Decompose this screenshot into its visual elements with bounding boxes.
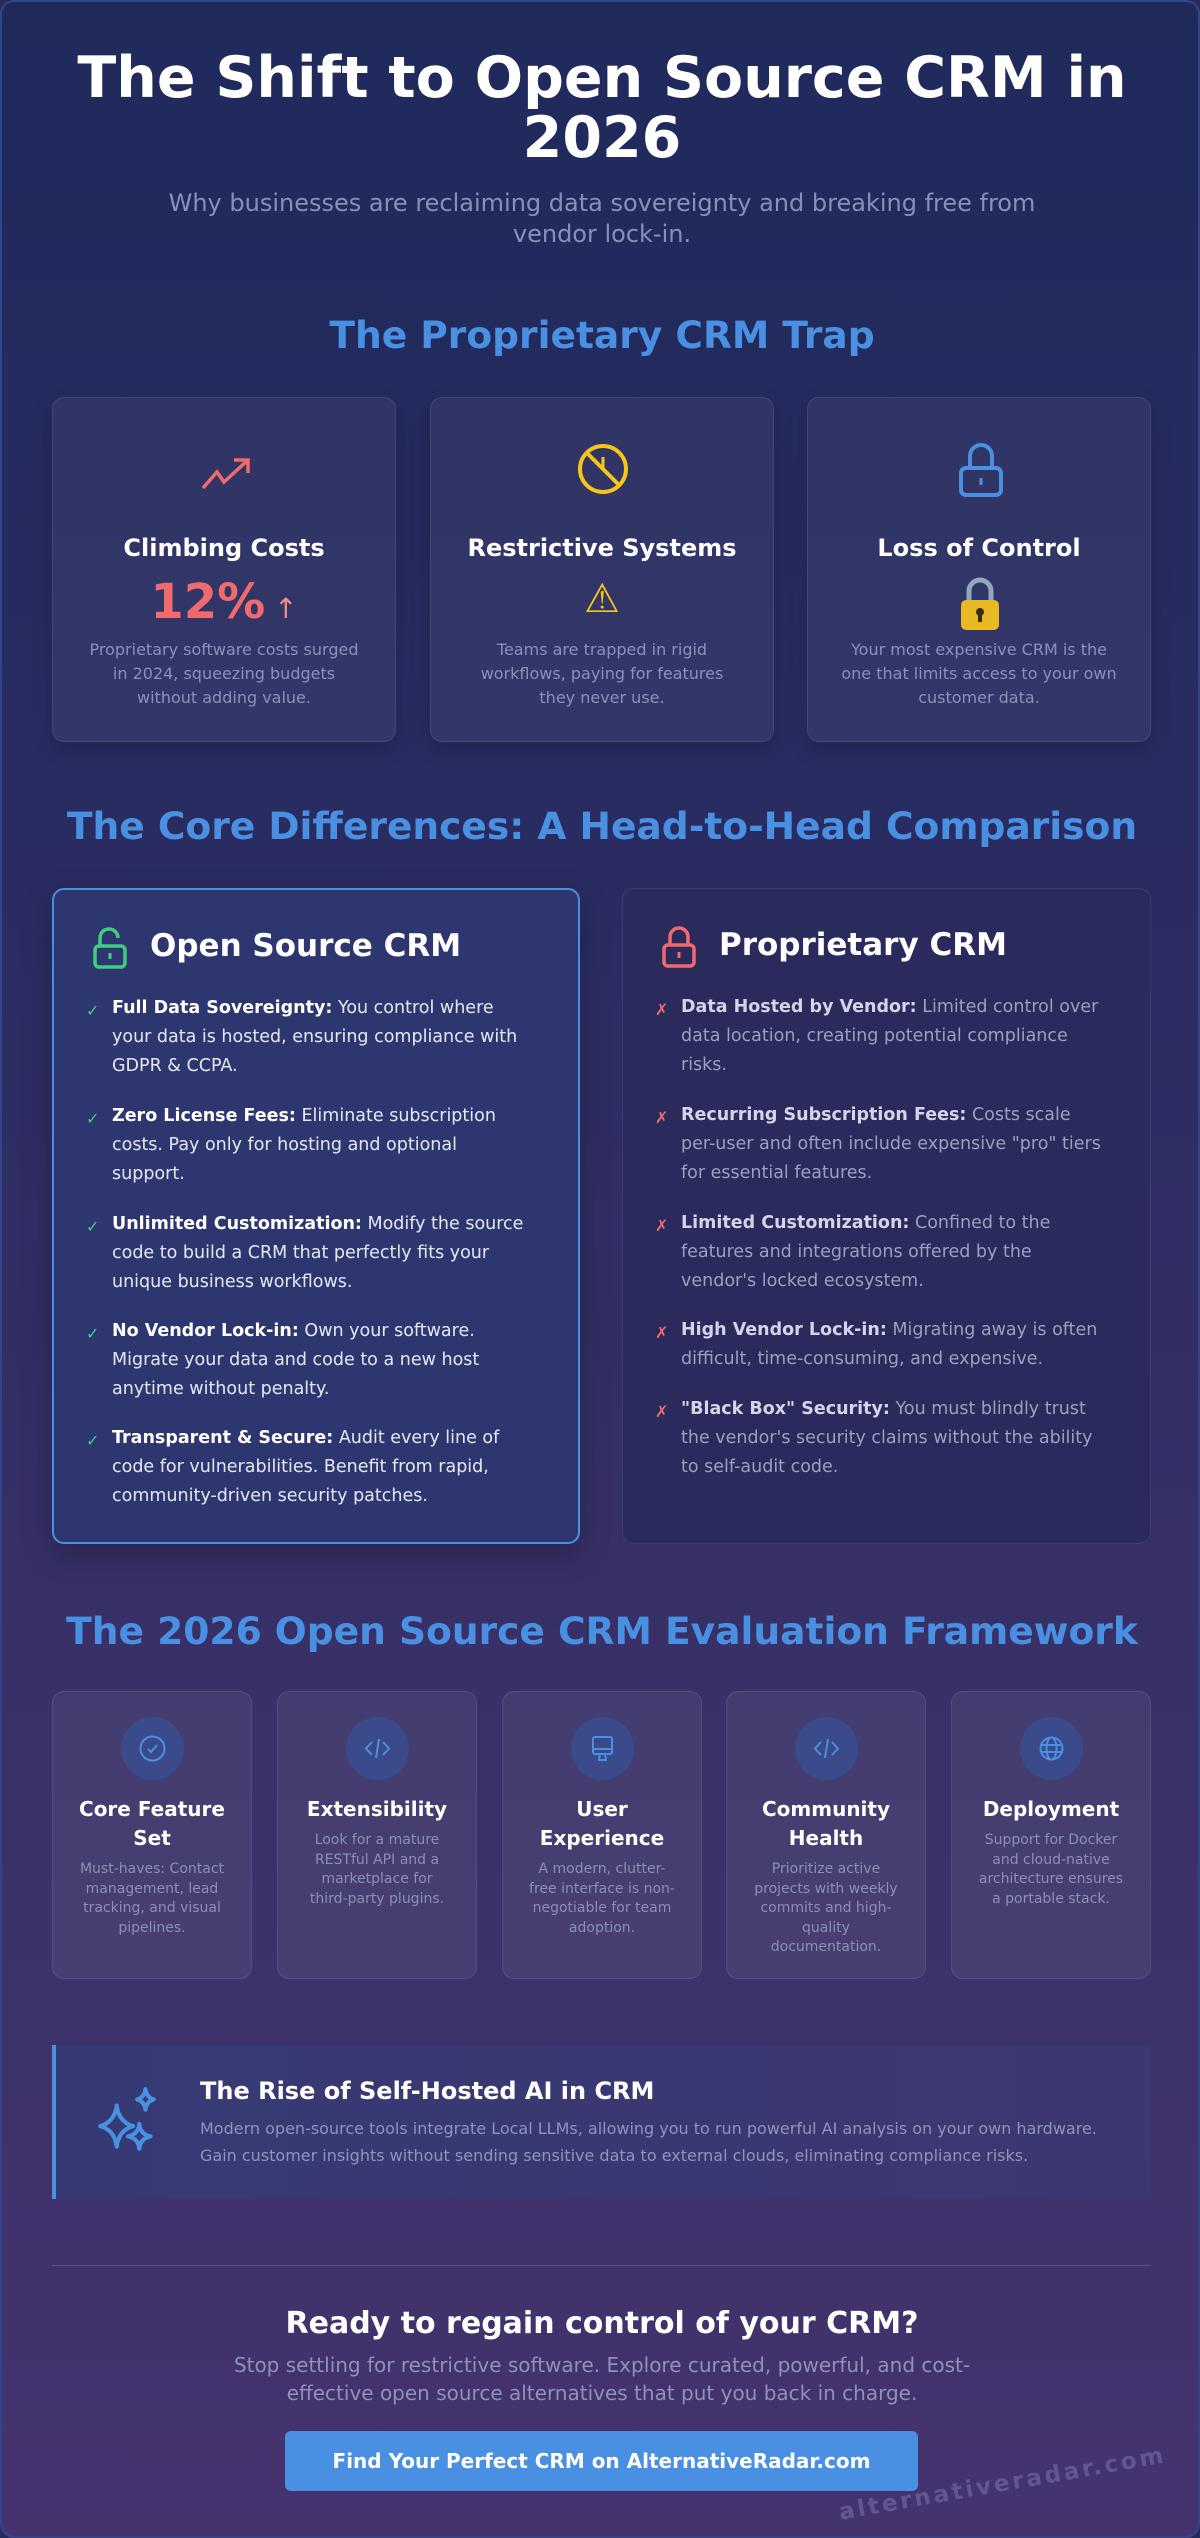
- panel heading: Open Source CRM: [150, 928, 461, 964]
- card: climbing costs: [52, 397, 396, 742]
- framework card: core feature set: Must-haves: Contact management, lead tracking, and visual pipelines.: [80, 1861, 224, 1936]
- framework card: user experience: User Experience: [540, 1797, 664, 1850]
- title: The Shift to Open Source CRM in 2026: [77, 45, 1127, 171]
- description: Proprietary software costs surged in 2024, squeezing budgets without adding value.: [90, 640, 358, 707]
- list: Full Data Sovereignty: You control where your data is hosted, ensuring compliance with GDPR & CCPA.: [112, 998, 517, 1076]
- list: ✗: [655, 1108, 668, 1127]
- icon: warning: ⚠: [584, 576, 620, 622]
- CTA button: [285, 2431, 918, 2491]
- list: Transparent & Secure: Audit every line of code for vulnerabilities. Benefit from rapid, community-driven security patches.: [112, 1428, 499, 1506]
- icon: globe: [1020, 1717, 1083, 1780]
- framework card: community health: [726, 1691, 926, 1979]
- list: Limited Customization: Confined to the features and integrations offered by the vendor's locked ecosystem.: [681, 1213, 1050, 1291]
- list: Zero License Fees: Eliminate subscription costs. Pay only for hosting and optional support.: [112, 1106, 496, 1184]
- card: restrictive systems: [430, 397, 774, 742]
- icon: no sign: [578, 444, 628, 494]
- panel: open source: [52, 888, 580, 1544]
- list: Data Hosted by Vendor: Limited control over data location, creating potential compliance risks.: [681, 997, 1098, 1075]
- description: Teams are trapped in rigid workflows, paying for features they never use.: [481, 640, 723, 707]
- framework card: community health: Prioritize active projects with weekly commits and high-quality documentation.: [754, 1861, 898, 1955]
- heading: framework: The 2026 Open Source CRM Evaluation Framework: [66, 1609, 1138, 1653]
- heading: proprietary trap: The Proprietary CRM Trap: [329, 313, 875, 357]
- icon: monitor: [571, 1717, 634, 1780]
- callout title: The Rise of Self-Hosted AI in CRM: [200, 2077, 654, 2105]
- framework card: deployment: Support for Docker and cloud-native architecture ensures a portable stack.: [979, 1832, 1123, 1906]
- card title: Restrictive Systems: [467, 534, 737, 562]
- framework card: community health: Community Health: [762, 1797, 890, 1850]
- framework card: extensibility: [277, 1691, 477, 1979]
- card title: Loss of Control: [877, 534, 1081, 562]
- watermark: alternativeradar.com: [837, 2442, 1168, 2526]
- panel heading: Proprietary CRM: [719, 927, 1007, 963]
- list: ✓: [86, 1324, 99, 1343]
- framework card: extensibility: Extensibility: [307, 1797, 447, 1821]
- icon: red lock: [662, 926, 696, 968]
- card title: Climbing Costs: [123, 534, 325, 562]
- list: [86, 998, 523, 1506]
- CTA button: Find Your Perfect CRM on AlternativeRadar.com: [333, 2449, 870, 2473]
- stat: 12% ↑: [150, 574, 298, 630]
- card: loss of control: [807, 397, 1151, 742]
- framework card: user experience: [502, 1691, 702, 1979]
- icon: green unlock: [93, 927, 127, 969]
- list: ✓: [86, 1431, 99, 1450]
- CTA heading: Ready to regain control of your CRM?: [286, 2306, 918, 2341]
- callout text: Modern open-source tools integrate Local LLMs, allowing you to run powerful AI analysis on your own hardware. Gain customer insights without sending sensitive data to external clouds, eliminating compliance risks.: [200, 2119, 1097, 2165]
- list: High Vendor Lock-in: Migrating away is often difficult, time-consuming, and expensive.: [681, 1320, 1097, 1369]
- icon: check circle: [121, 1717, 184, 1780]
- subtitle: Why businesses are reclaiming data sovereignty and breaking free from vendor lock-in.: [169, 189, 1035, 248]
- list: ✓: [86, 1217, 99, 1236]
- list: ✗: [655, 1402, 668, 1421]
- icon: code: [346, 1717, 409, 1780]
- list: ✗: [655, 1216, 668, 1235]
- list: ✓: [86, 1001, 99, 1020]
- list: No Vendor Lock-in: Own your software. Migrate your data and code to a new host anytime without penalty.: [112, 1321, 479, 1399]
- list: [655, 997, 1101, 1477]
- framework card: core feature set: Core Feature Set: [79, 1797, 225, 1850]
- icon: code: [795, 1717, 858, 1780]
- framework card: extensibility: Look for a mature RESTful API and a marketplace for third-party plugins.: [310, 1832, 444, 1906]
- framework card: user experience: A modern, clutter-free interface is non-negotiable for team adoption.: [529, 1861, 675, 1936]
- icon: sparkles: [98, 2087, 156, 2151]
- list: ✗: [655, 1323, 668, 1342]
- icon: padlock emoji: [961, 578, 999, 630]
- list: "Black Box" Security: You must blindly trust the vendor's security claims without the ability to self-audit code.: [681, 1399, 1092, 1477]
- icon: trend up: [202, 458, 250, 490]
- framework card: deployment: [951, 1691, 1151, 1979]
- list: Unlimited Customization: Modify the source code to build a CRM that perfectly fits your unique business workflows.: [112, 1214, 523, 1292]
- panel: proprietary: [622, 888, 1151, 1544]
- list: ✓: [86, 1109, 99, 1128]
- list: Recurring Subscription Fees: Costs scale per-user and often include expensive "pro" tiers for essential features.: [681, 1105, 1101, 1183]
- heading: comparison: The Core Differences: A Head-to-Head Comparison: [67, 804, 1137, 848]
- list: ✗: [655, 1000, 668, 1019]
- framework card: deployment: Deployment: [983, 1797, 1119, 1821]
- CTA text: Stop settling for restrictive software. Explore curated, powerful, and cost-effective open source alternatives that put you back in charge.: [234, 2353, 970, 2405]
- icon: open lock: [959, 443, 1003, 497]
- callout: self-hosted AI: [52, 2045, 1151, 2199]
- framework card: core feature set: [52, 1691, 252, 1979]
- description: Your most expensive CRM is the one that limits access to your own customer data.: [841, 640, 1117, 707]
